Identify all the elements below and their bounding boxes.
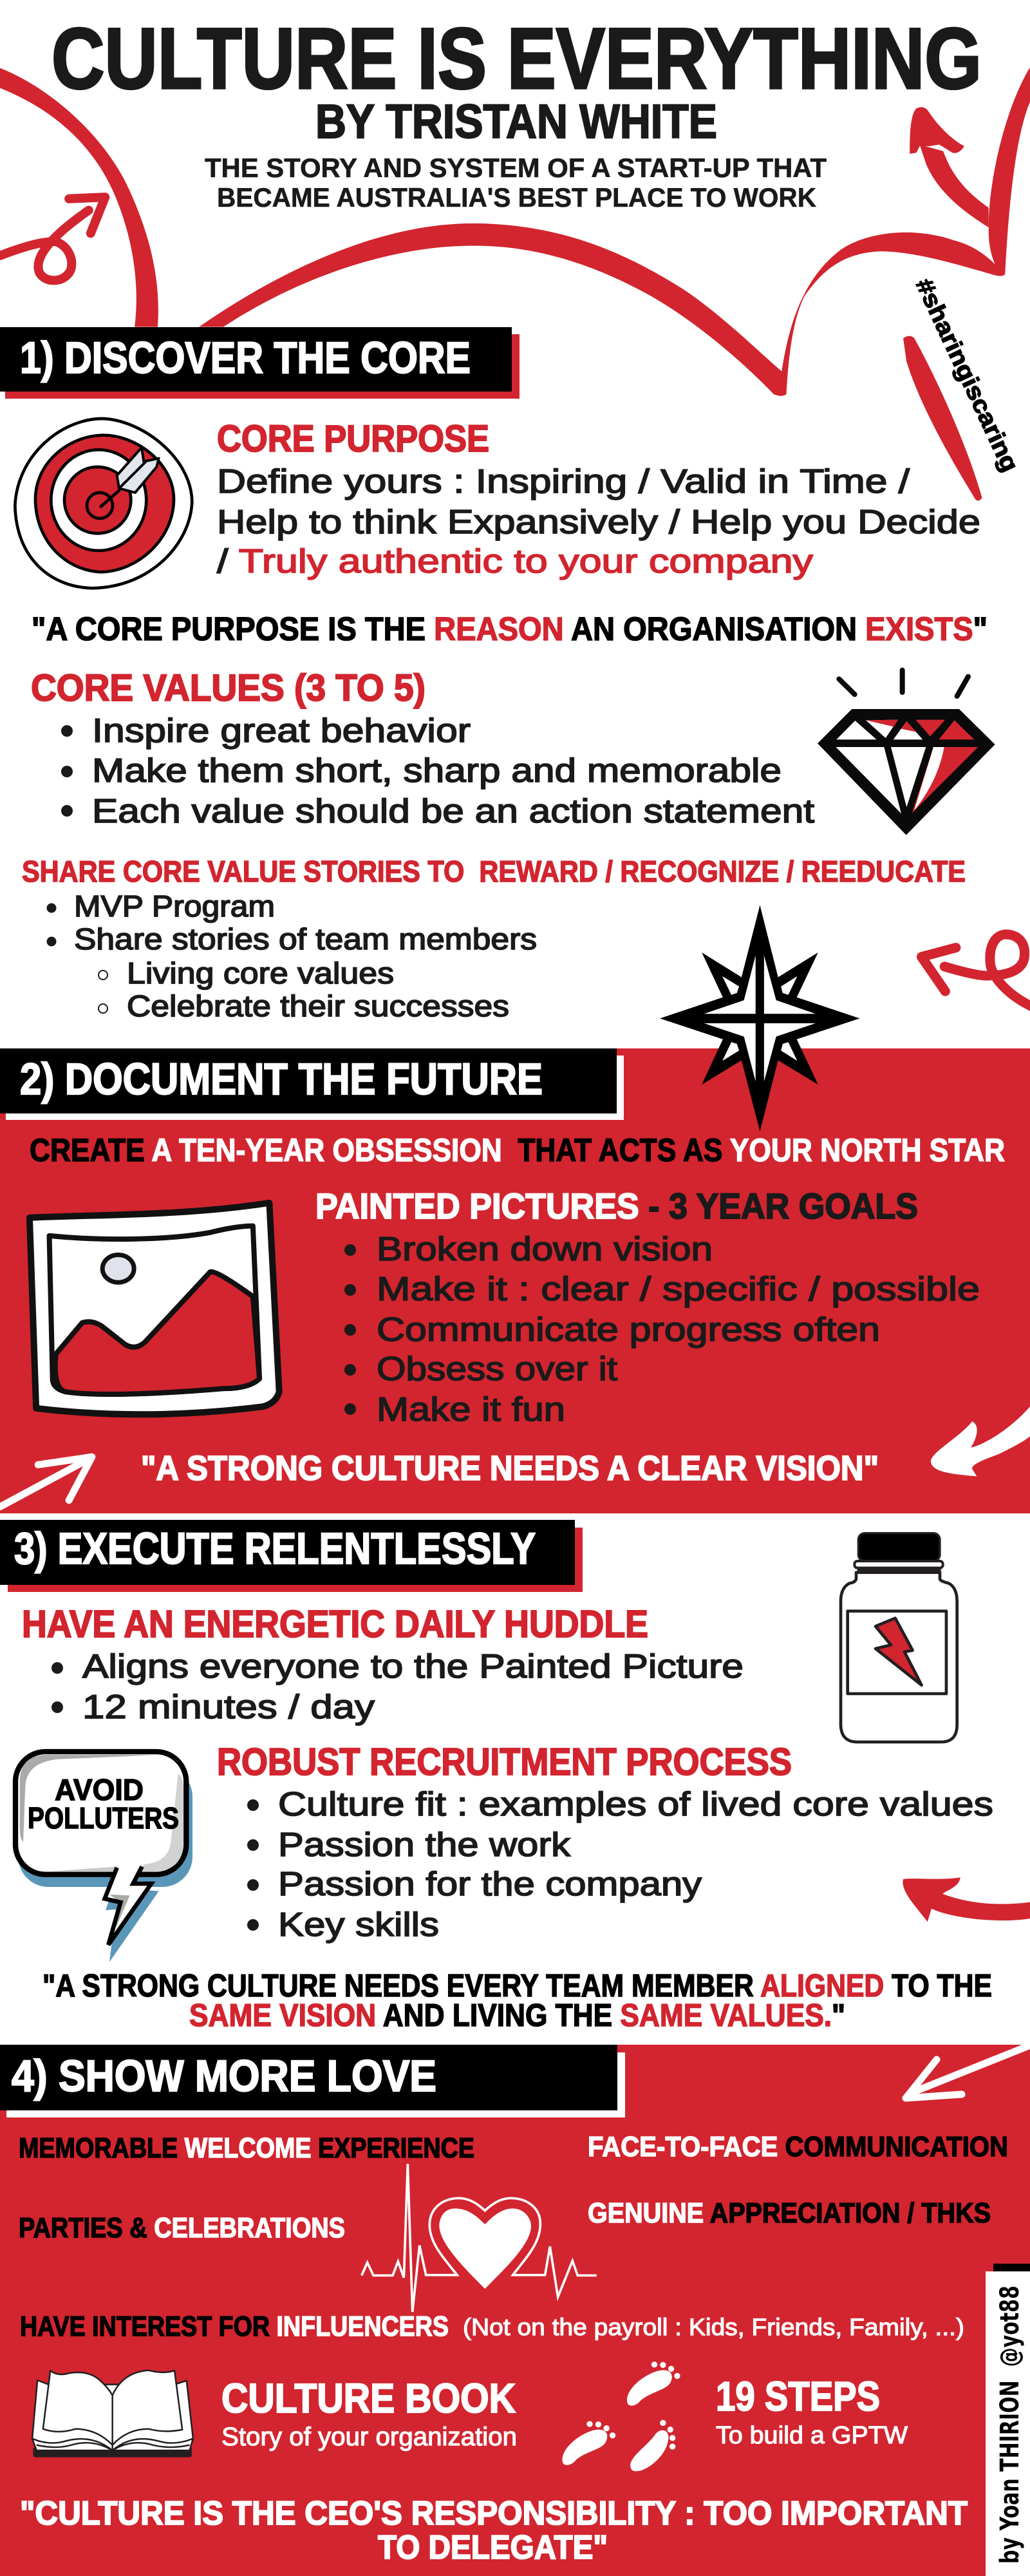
panel: core values: Make them short, sharp and memorable: [92, 752, 782, 790]
panel: core purpose: Define yours : Inspiring / Valid in Time /: [217, 463, 910, 500]
panel: share core value stories: Living core values: [127, 956, 394, 990]
quote: core purpose: "A CORE PURPOSE IS THE REASON AN ORGANISATION EXISTS": [32, 611, 988, 647]
panel: painted pictures: Make it : clear / specific / possible: [377, 1271, 980, 1308]
section 1 header: 1) DISCOVER THE CORE: [20, 333, 471, 383]
item: influencers: [20, 2311, 964, 2342]
callout: culture book: [221, 2375, 517, 2451]
item: memorable welcome experience: MEMORABLE WELCOME EXPERIENCE: [19, 2132, 474, 2164]
panel: daily huddle: [22, 1603, 744, 1726]
panel: painted pictures: Make it fun: [377, 1391, 565, 1428]
panel: painted pictures: Communicate progress often: [377, 1311, 880, 1349]
credit strip: by Yoan THIRION @yot88: [995, 2286, 1025, 2564]
quote: clear vision: "A STRONG CULTURE NEEDS A CLEAR VISION": [141, 1449, 879, 1488]
quote: aligned team: "A STRONG CULTURE NEEDS EVERY TEAM MEMBER ALIGNED TO THE: [42, 1969, 992, 2003]
panel: core purpose: CORE PURPOSE: [217, 418, 489, 460]
icon: target with dart: [15, 419, 192, 588]
panel: painted pictures: Obsess over it: [377, 1350, 618, 1388]
decorative red swooshes at top: [0, 68, 1030, 501]
item: influencers: HAVE INTEREST FOR INFLUENCERS: [20, 2311, 449, 2342]
quote: aligned team: [42, 1969, 992, 2033]
icon: diamond: [818, 670, 995, 835]
subtitle: description: [205, 153, 827, 213]
icon: energy bottle: [841, 1533, 957, 1742]
statement: ten-year obsession: CREATE A TEN-YEAR OBSESSION THAT ACTS AS YOUR NORTH STAR: [30, 1132, 1005, 1168]
panel: share core value stories: Share stories of team members: [74, 922, 537, 956]
subtitle: author: BY TRISTAN WHITE: [315, 95, 717, 148]
panel: painted pictures: [315, 1186, 980, 1428]
arrow: white arrow bottom left: [0, 1457, 92, 1507]
section 2 header: 2) DOCUMENT THE FUTURE: [20, 1054, 543, 1104]
icon: footprints: [563, 2362, 680, 2471]
section 3 header: [0, 1520, 583, 1592]
panel: core purpose: [217, 418, 980, 580]
panel: share core value stories: [22, 855, 966, 1023]
panel: core values: Each value should be an action statement: [92, 793, 815, 830]
panel: robust recruitment process: Key skills: [278, 1906, 439, 1944]
icon: avoid polluters speech bubble: [15, 1752, 192, 1962]
quote: CEO's responsibility: TO DELEGATE": [378, 2529, 608, 2566]
panel: robust recruitment process: Passion for the company: [278, 1866, 702, 1903]
arrow: red loop arrow pointing left: [921, 934, 1030, 1009]
quote: aligned team: SAME VISION AND LIVING THE SAME VALUES.": [189, 1998, 845, 2033]
icon: compass star: [660, 905, 859, 1132]
band: section 2 background: [0, 1048, 1030, 1513]
section 3 header: 3) EXECUTE RELENTLESSLY: [14, 1524, 536, 1573]
panel: core purpose: Help to think Expansively / Help you Decide: [217, 504, 980, 541]
item: genuine appreciation: GENUINE APPRECIATION / THKS: [588, 2197, 991, 2229]
item: influencers: (Not on the payroll : Kids, Friends, Family, ...): [463, 2314, 964, 2340]
icon: heart with heartbeat line: [362, 2164, 597, 2312]
panel: core values: [31, 667, 815, 830]
callout: 19 steps: [716, 2373, 908, 2449]
panel: share core value stories: MVP Program: [74, 889, 275, 923]
subtitle: description: BECAME AUSTRALIA'S BEST PLACE TO WORK: [217, 182, 816, 213]
item: parties and celebrations: PARTIES & CELEBRATIONS: [19, 2212, 345, 2244]
bubble label: POLLUTERS: [28, 1801, 179, 1835]
panel: robust recruitment process: Passion the work: [278, 1826, 571, 1864]
panel: painted pictures: PAINTED PICTURES - 3 YEAR GOALS: [315, 1186, 918, 1226]
bubble label: [28, 1773, 179, 1835]
panel: daily huddle: Aligns everyone to the Painted Picture: [82, 1648, 744, 1685]
item: face-to-face communication: FACE-TO-FACE COMMUNICATION: [588, 2131, 1008, 2163]
panel: daily huddle: 12 minutes / day: [82, 1689, 375, 1726]
panel: core purpose: / Truly authentic to your company: [217, 543, 813, 580]
icon: painted picture: [30, 1203, 279, 1414]
section 4 header: [0, 2045, 625, 2117]
callout: culture book: CULTURE BOOK: [221, 2375, 516, 2421]
panel: core values: CORE VALUES (3 TO 5): [31, 667, 426, 709]
hashtag: #sharingiscaring: [911, 274, 1024, 476]
section 2 header: [0, 1048, 624, 1120]
panel: robust recruitment process: [217, 1741, 993, 1944]
arrow: white arrow bottom right: [931, 1406, 1030, 1476]
panel: daily huddle: HAVE AN ENERGETIC DAILY HUDDLE: [22, 1603, 648, 1645]
arrow: red loop arrow top left: [0, 197, 105, 280]
panel: robust recruitment process: ROBUST RECRUITMENT PROCESS: [217, 1741, 792, 1783]
section 4 header: 4) SHOW MORE LOVE: [12, 2051, 436, 2101]
subtitle: description: THE STORY AND SYSTEM OF A START-UP THAT: [205, 153, 827, 183]
arrow: white arrow top right of section 4: [906, 2045, 1030, 2098]
callout: culture book: Story of your organization: [221, 2423, 517, 2451]
panel: core values: Inspire great behavior: [92, 712, 471, 750]
credit strip: [986, 2264, 1030, 2576]
panel: painted pictures: Broken down vision: [377, 1231, 713, 1268]
bubble label: AVOID: [55, 1773, 144, 1806]
quote: CEO's responsibility: [20, 2495, 968, 2566]
arrow: red arrow pointing left: [903, 1877, 1030, 1922]
icon: open book: [32, 2371, 193, 2458]
band: section 4 background: [0, 2045, 1030, 2576]
quote: CEO's responsibility: "CULTURE IS THE CEO'S RESPONSIBILITY : TOO IMPORTANT: [20, 2495, 968, 2532]
section 1 header: [0, 327, 520, 399]
panel: robust recruitment process: Culture fit : examples of lived core values: [278, 1786, 993, 1823]
callout: 19 steps: To build a GPTW: [716, 2422, 908, 2449]
callout: 19 steps: 19 STEPS: [716, 2373, 880, 2420]
panel: share core value stories: Celebrate their successes: [127, 989, 509, 1023]
